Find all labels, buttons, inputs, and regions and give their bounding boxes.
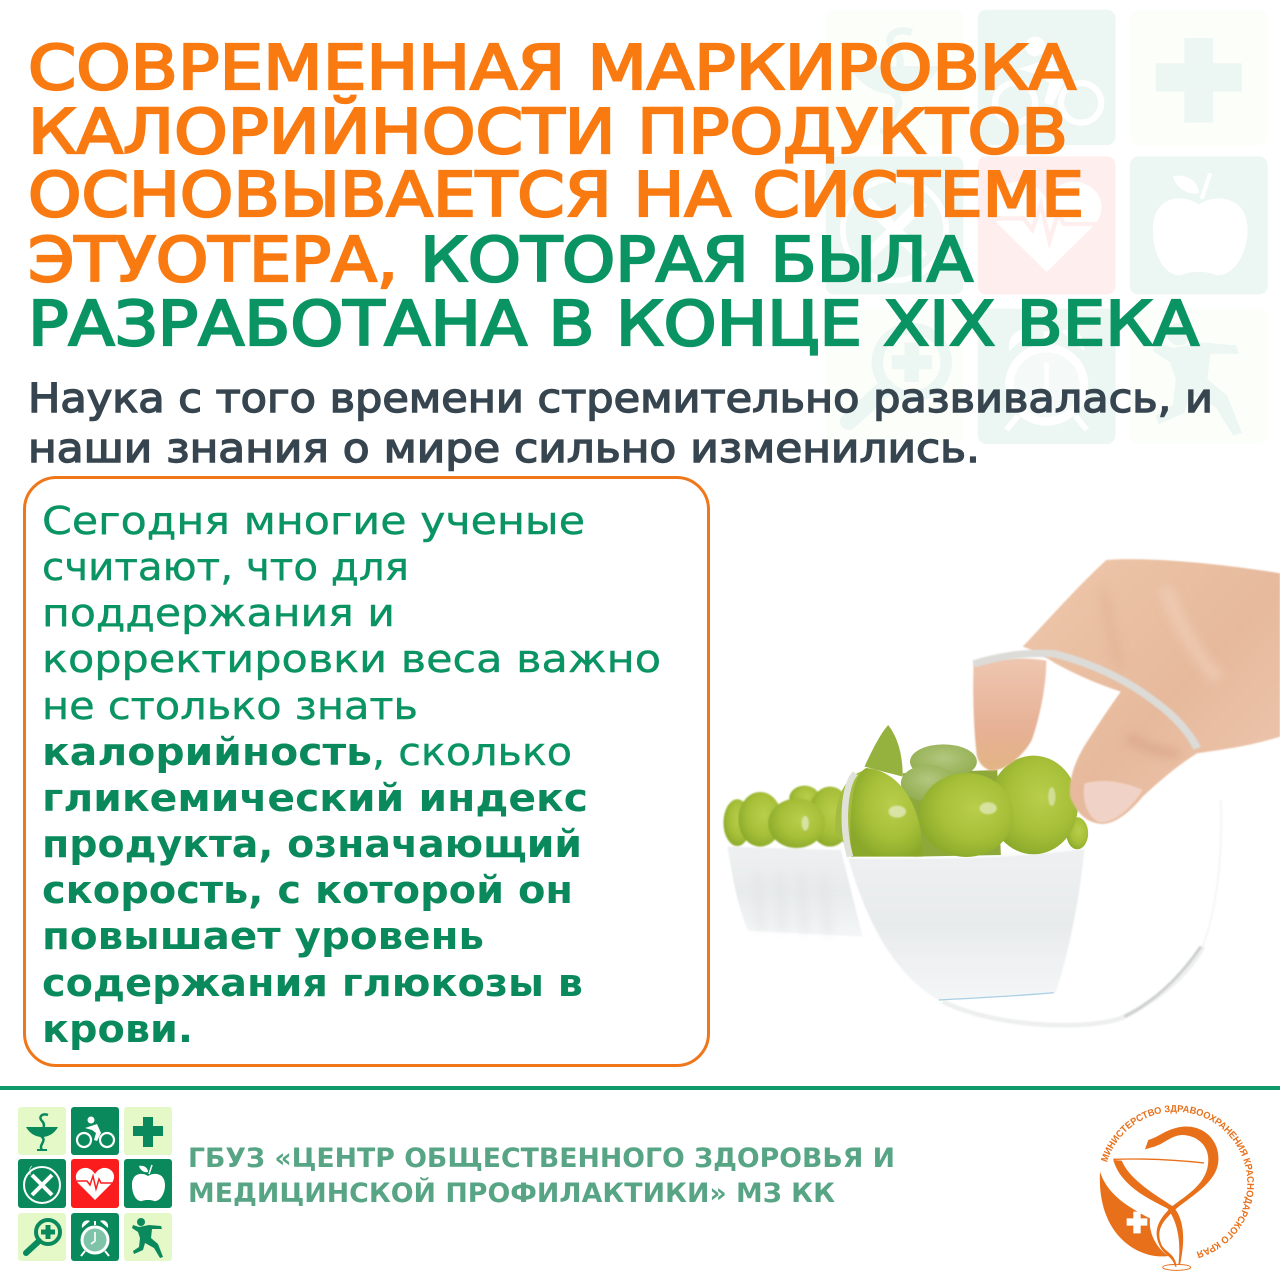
icon: heart (71, 1159, 119, 1208)
body text: Сегодня многие ученые (42, 499, 585, 543)
index finger (973, 658, 1046, 771)
title (28, 32, 1199, 360)
icon: alarm clock (71, 1213, 119, 1261)
left grapes (723, 786, 852, 848)
big bowl (848, 847, 1085, 1001)
title: РАЗРАБОТАНА В КОНЦЕ XIX ВЕКА (28, 288, 1199, 360)
body text: крови. (42, 1007, 193, 1051)
icon: apple (124, 1159, 172, 1208)
footer text: ГБУЗ «ЦЕНТР ОБЩЕСТВЕННОГО ЗДОРОВЬЯ И (188, 1143, 895, 1174)
subtitle: наши знания о мире сильно изменились. (28, 426, 980, 472)
subtitle (28, 376, 1213, 472)
big grapes (835, 725, 1088, 857)
logo crescent with cross (1100, 1172, 1168, 1256)
photo: hand picking grapes from a bowl (723, 559, 1280, 1025)
body text: , сколько (372, 730, 572, 774)
subtitle: Наука с того времени стремительно развивалась, и (28, 376, 1213, 422)
logo ring text (1107, 1112, 1247, 1252)
icon: magnifier (18, 1213, 66, 1261)
icon: plus (124, 1107, 172, 1155)
icon: bicycle (71, 1107, 119, 1155)
body text (42, 499, 661, 1051)
body text: гликемический индекс (42, 776, 588, 820)
icon grid (18, 1107, 172, 1261)
lens outline (943, 800, 1221, 1025)
divider (0, 1086, 1280, 1090)
body text: калорийность (42, 730, 372, 774)
thumbnail (1084, 781, 1143, 823)
bowl bottom tint (939, 993, 1054, 1000)
icon: caduceus (18, 1107, 66, 1155)
title: СОВРЕМЕННАЯ МАРКИРОВКА (28, 32, 1076, 104)
title: КОТОРАЯ БЫЛА (420, 224, 973, 296)
body text: не столько знать (42, 684, 418, 728)
logo cup (1113, 1159, 1204, 1163)
footer text (188, 1143, 895, 1209)
logo serpent (1145, 1127, 1218, 1267)
lens rim on hand (974, 653, 1197, 748)
icon: no smoking (18, 1159, 66, 1208)
title: ОСНОВЫВАЕТСЯ НА СИСТЕМЕ (28, 159, 1084, 231)
panel: text box (24, 478, 708, 1066)
hand and thumb (1023, 559, 1280, 824)
logo: ministry of health: МИНИСТЕРСТВО ЗДРАВООХРАНЕНИЯ КРАСНОДАРСКОГО КРАЯ (1100, 1105, 1254, 1258)
body text: корректировки веса важно (42, 637, 661, 681)
footer text: МЕДИЦИНСКОЙ ПРОФИЛАКТИКИ» МЗ КК (188, 1177, 835, 1209)
body text: продукта, означающий (42, 822, 582, 866)
body text: повышает уровень (42, 914, 484, 958)
body text: поддержания и (42, 591, 395, 635)
icon: runner (124, 1213, 172, 1261)
body text: считают, что для (42, 545, 409, 589)
body text: содержания глюкозы в (42, 961, 583, 1005)
title: КАЛОРИЙНОСТИ ПРОДУКТОВ (28, 95, 1068, 168)
title: ЭТУОТЕРА, (28, 224, 398, 296)
left bowl (727, 847, 863, 937)
body text: скорость, с которой он (42, 868, 573, 912)
watermark icon grid (826, 10, 1268, 444)
